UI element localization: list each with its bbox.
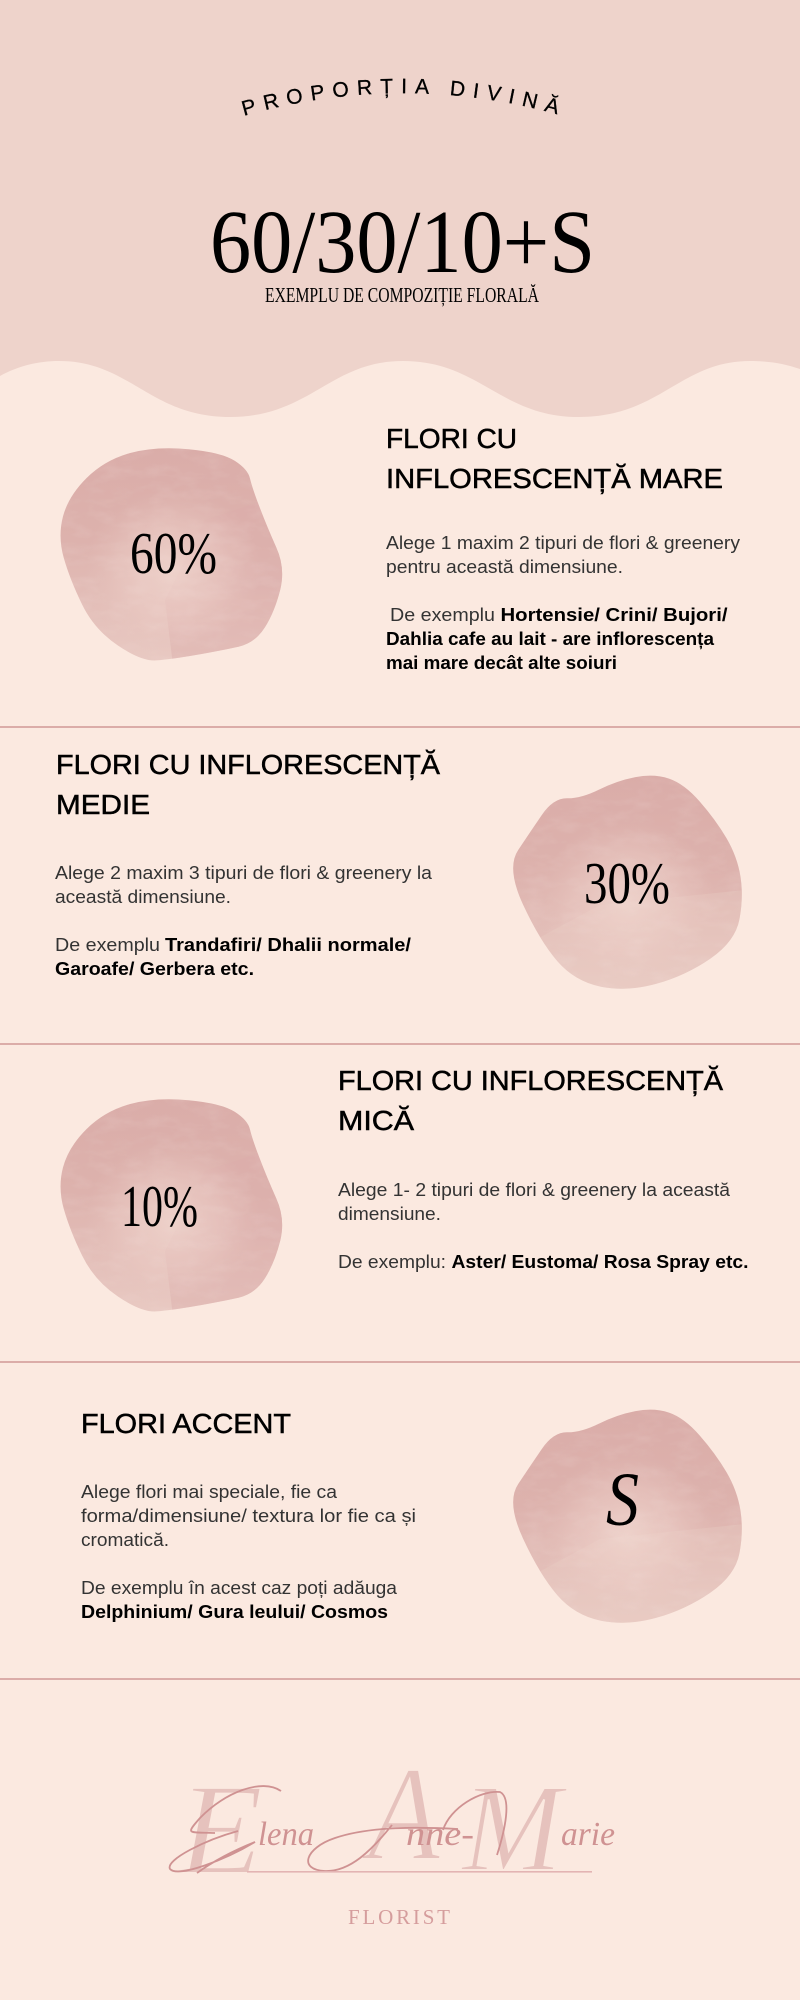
heading: MEDIE — [56, 789, 150, 820]
panel: 30 percent — [55, 749, 750, 995]
text block: Garoafe/ Gerbera etc. — [55, 958, 254, 979]
subtitle: EXEMPLU DE COMPOZIȚIE FLORALĂ — [265, 283, 540, 307]
heading: MICĂ — [338, 1105, 414, 1136]
signature logo: Elena Anne-Marie: A — [361, 1740, 440, 1889]
divider — [0, 1361, 800, 1363]
heading — [338, 1065, 723, 1136]
text block: cromatică. — [81, 1529, 169, 1550]
header band with wavy edge — [0, 0, 800, 417]
text block — [338, 1179, 748, 1272]
text block: De exemplu — [55, 934, 160, 955]
text block: Alege 1 maxim 2 tipuri de flori & greenery — [386, 532, 741, 553]
heading: FLORI CU INFLORESCENȚĂ — [56, 749, 440, 780]
text block: Hortensie/ Crini/ Bujori/ — [500, 604, 728, 625]
signature logo: Elena Anne-Marie: lena — [258, 1816, 314, 1853]
title: 60/30/10+S: 60/30/10+S — [210, 193, 595, 292]
text block: dimensiune. — [338, 1203, 441, 1224]
divider — [0, 1678, 800, 1680]
panel: 10 percent — [50, 1065, 748, 1316]
divider — [0, 1043, 800, 1045]
text block — [55, 862, 433, 979]
text block: mai mare decât alte soiuri — [386, 652, 617, 673]
signature logo: Elena Anne-Marie: arie — [561, 1816, 615, 1853]
text block: Alege 2 maxim 3 tipuri de flori & greenery la — [55, 862, 433, 883]
text block — [81, 1481, 416, 1622]
watercolor blob: 10% — [60, 1099, 282, 1312]
label: 30%: 30% — [584, 850, 670, 916]
text block: Alege flori mai speciale, fie ca — [81, 1481, 338, 1502]
label: S: S — [606, 1458, 639, 1542]
heading: INFLORESCENȚĂ MARE — [386, 463, 723, 494]
panel: 60 percent — [50, 423, 741, 673]
text block: Delphinium/ Gura leului/ Cosmos — [81, 1601, 388, 1622]
arched heading: Proporția divină: PROPORȚIA DIVINĂ — [242, 78, 559, 116]
text block: Dahlia cafe au lait - are inflorescența — [386, 628, 715, 649]
heading: FLORI CU INFLORESCENȚĂ — [338, 1065, 723, 1096]
text block: Alege 1- 2 tipuri de flori & greenery la această — [338, 1179, 731, 1200]
panel: accent flowers — [81, 1404, 750, 1629]
signature logo: Elena Anne-Marie: nne- — [406, 1816, 474, 1853]
text block: pentru această dimensiune. — [386, 556, 623, 577]
heading: FLORI CU — [386, 423, 517, 454]
text block — [386, 532, 741, 673]
heading: FLORI ACCENT — [81, 1408, 291, 1439]
heading — [56, 749, 440, 820]
text block: Trandafiri/ Dhalii normale/ — [165, 934, 411, 955]
signature logo: Elena Anne-Marie: M — [460, 1760, 568, 1898]
divider — [0, 726, 800, 728]
caption: Florist: FLORIST — [348, 1905, 450, 1929]
label: 60%: 60% — [130, 520, 217, 586]
text block: această dimensiune. — [55, 886, 231, 907]
text block: Aster/ Eustoma/ Rosa Spray etc. — [452, 1251, 748, 1272]
watercolor blob: S — [513, 1410, 742, 1623]
signature logo: Elena Anne-Marie: E — [176, 1758, 263, 1902]
text block: De exemplu în acest caz poți adăuga — [81, 1577, 398, 1598]
heading — [386, 423, 723, 494]
label: 10%: 10% — [121, 1173, 198, 1239]
watercolor blob: 60% — [60, 448, 282, 660]
text block: De exemplu: — [338, 1251, 446, 1272]
signature underline — [247, 1871, 592, 1873]
text block: De exemplu — [390, 604, 495, 625]
text block: forma/dimensiune/ textura lor fie ca și — [81, 1505, 416, 1526]
signature logo: Elena Anne-Marie — [170, 1740, 615, 1902]
watercolor blob: 30% — [513, 776, 742, 989]
